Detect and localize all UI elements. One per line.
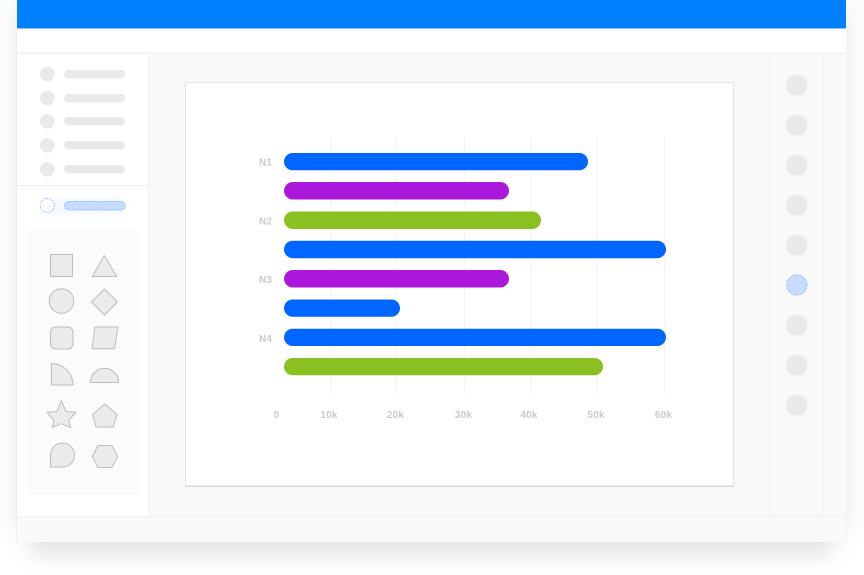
menu item 2 — [40, 91, 125, 105]
icon: semicircle — [90, 368, 119, 382]
category labels: N4 — [259, 334, 272, 345]
tool button 5 — [786, 234, 808, 256]
tool button 1 — [786, 74, 808, 96]
menu item 4 — [40, 138, 125, 153]
category labels: N1 — [259, 158, 272, 168]
category labels: N2 — [259, 216, 272, 228]
icon: circle — [49, 289, 74, 313]
icon: diamond — [91, 289, 117, 315]
menu item 1 — [40, 67, 125, 81]
canvas page — [185, 82, 734, 487]
top header bar — [17, 0, 846, 28]
icon: teardrop — [50, 443, 74, 467]
icon: square — [50, 254, 72, 276]
icon: quarter circle — [52, 364, 73, 385]
tool button 3 — [786, 154, 808, 176]
menu item 5 — [40, 162, 125, 177]
bars — [284, 153, 666, 375]
icon: star — [47, 400, 76, 428]
icon: parallelogram — [92, 327, 118, 349]
selected tool button — [787, 275, 807, 295]
icon: hexagon — [92, 446, 118, 468]
axis labels: 30k — [455, 410, 472, 421]
category labels: N3 — [259, 275, 272, 286]
status bar — [17, 516, 846, 542]
tool button 7 — [786, 314, 808, 336]
axis labels: 40k — [520, 410, 538, 421]
tool button 4 — [786, 194, 808, 216]
axis labels — [274, 410, 672, 421]
right panel — [769, 54, 824, 516]
selected menu item — [40, 198, 127, 214]
tool button 9 — [786, 394, 808, 416]
tool button 8 — [786, 354, 808, 376]
tool button 2 — [786, 114, 808, 136]
icon: rounded square — [50, 327, 73, 349]
icon: triangle — [92, 256, 117, 276]
menu item 3 — [40, 114, 125, 129]
axis labels: 50k — [587, 410, 605, 421]
axis labels: 20k — [387, 410, 404, 421]
category labels — [259, 158, 272, 345]
shape palette — [29, 231, 137, 494]
toolbar — [17, 28, 846, 54]
bar chart — [259, 136, 672, 421]
axis labels: 10k — [320, 410, 338, 421]
left sidebar — [17, 54, 149, 516]
icon: pentagon — [93, 404, 117, 427]
axis labels: 0 — [274, 410, 280, 421]
axis labels: 60k — [655, 410, 672, 421]
